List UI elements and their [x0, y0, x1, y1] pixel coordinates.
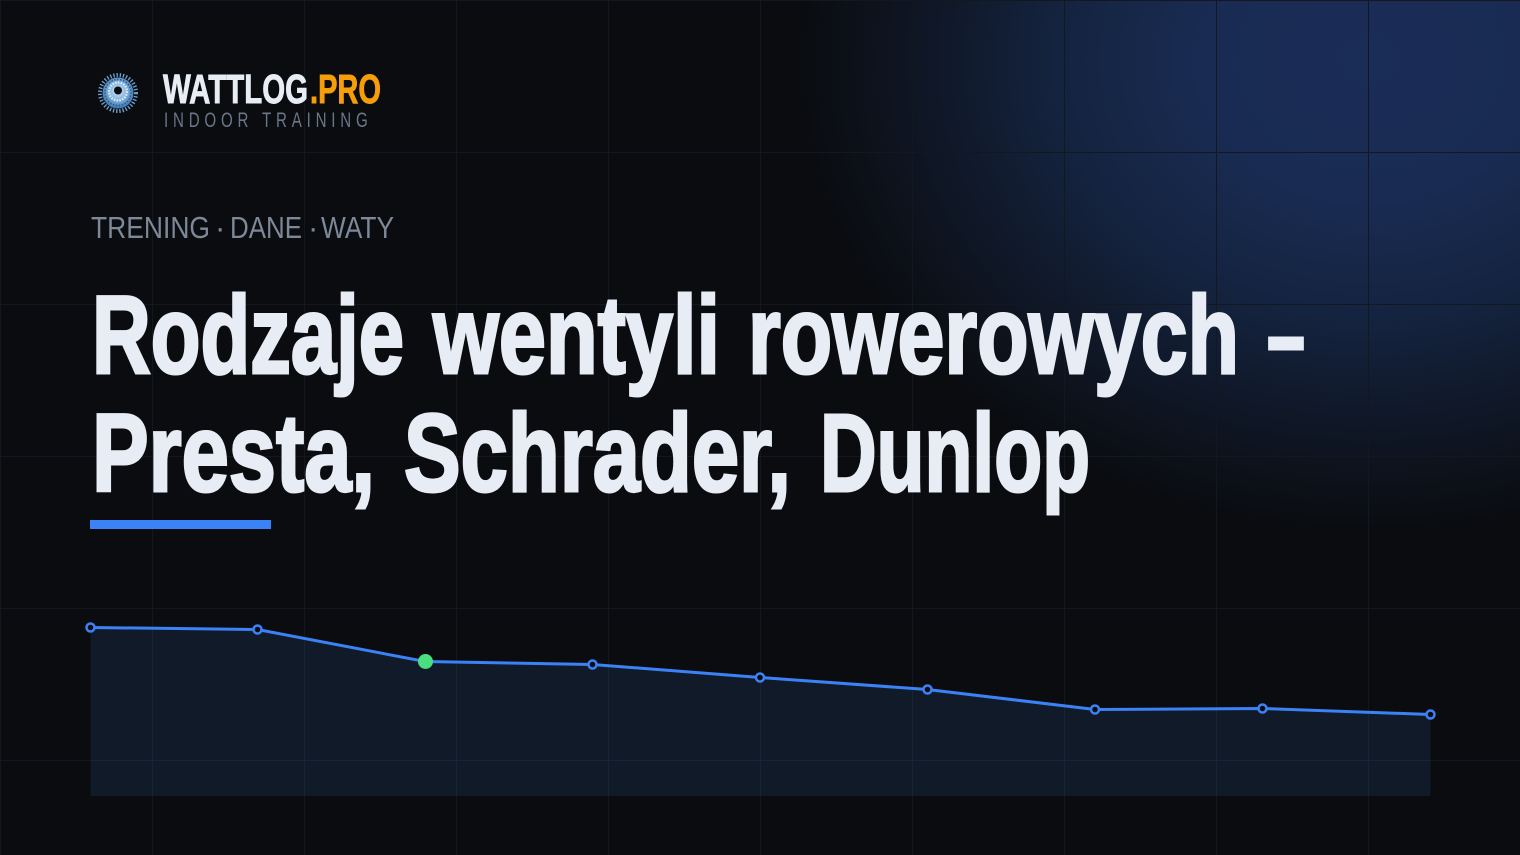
chart line — [90, 628, 1430, 714]
brand name: WATTLOG — [163, 66, 308, 112]
chart area fill — [90, 628, 1430, 796]
title: Dunlop — [820, 392, 1090, 515]
eyebrow — [91, 210, 394, 245]
line chart — [86, 624, 1434, 796]
highlighted point — [418, 654, 433, 669]
title: – — [1267, 274, 1305, 397]
eyebrow: DANE — [230, 210, 302, 245]
eyebrow: WATY — [321, 210, 394, 245]
title: Schrader, — [404, 392, 791, 515]
chart points — [86, 624, 1434, 718]
title accent underline — [90, 520, 271, 529]
brand tagline: INDOOR TRAINING — [164, 107, 368, 132]
eyebrow: TRENING — [91, 210, 210, 245]
eyebrow: · — [215, 210, 225, 245]
logo: sprocket cassette icon — [100, 75, 136, 111]
brand name: .PRO — [310, 66, 381, 112]
title: wentyli — [432, 274, 720, 397]
title: rowerowych — [748, 274, 1239, 397]
eyebrow: · — [308, 210, 318, 245]
title: Rodzaje — [92, 274, 404, 397]
title — [92, 274, 1305, 515]
title: Presta, — [92, 392, 375, 515]
